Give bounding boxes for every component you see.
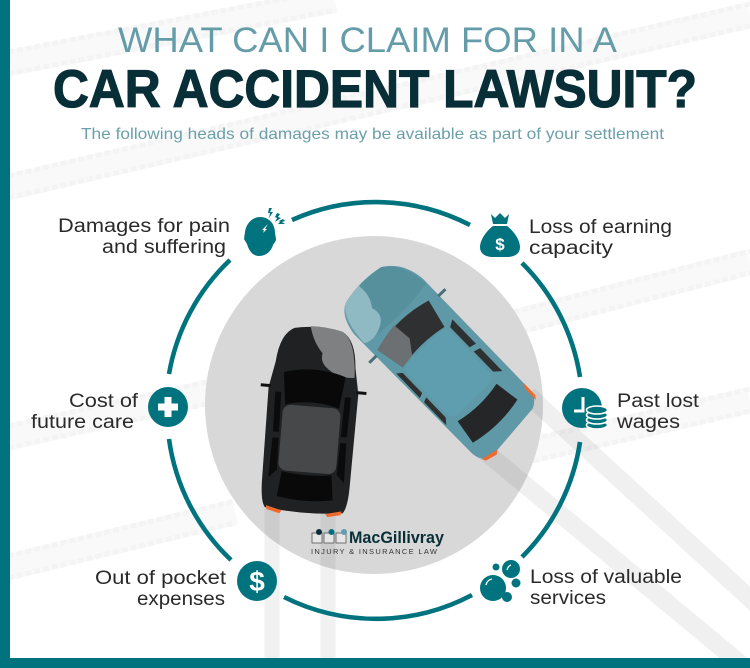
icon: dollar (237, 561, 277, 601)
arc: top (292, 202, 470, 225)
label: past lost wages: Past lost (617, 391, 700, 412)
label: past lost wages (616, 391, 700, 433)
title line 1: WHAT CAN I CLAIM FOR IN A (118, 21, 618, 60)
logo tagline: INJURY & INSURANCE LAW (311, 547, 438, 556)
icon: head with lightning (244, 208, 285, 256)
title line 2: CAR ACCIDENT LAWSUIT? (53, 60, 697, 119)
label: out of pocket expenses: expenses (137, 589, 225, 610)
label: loss of earning capacity: Loss of earning (529, 217, 672, 238)
icon: money bag (480, 213, 520, 257)
bottom frame bar (0, 658, 750, 668)
label: pain and suffering: and suffering (102, 237, 226, 258)
arc: upper left (169, 260, 230, 374)
icon: clock and coins (562, 388, 608, 429)
label: loss of earning capacity: capacity (529, 238, 614, 259)
icon: plus (148, 387, 188, 427)
arc: upper right (522, 263, 580, 377)
label: cost of future care: Cost of (69, 391, 139, 412)
logo name: MacGillivray (349, 528, 445, 547)
icon: dollar: $ (249, 566, 265, 597)
subtitle: The following heads of damages may be available as part of your settlement (81, 126, 665, 143)
left frame bar (0, 0, 10, 668)
label: cost of future care (31, 391, 139, 433)
label: loss of earning capacity (529, 217, 672, 259)
icon: bubbles (480, 560, 520, 602)
ring segments (169, 202, 580, 619)
arc: bottom (284, 595, 472, 619)
arc: lower right (522, 442, 580, 557)
logo mark (312, 529, 347, 543)
label: past lost wages: wages (616, 412, 680, 433)
black car (250, 322, 372, 520)
grey centre circle (205, 236, 543, 574)
skid marks (272, 395, 750, 668)
label: loss of valuable services: Loss of valuable (530, 567, 682, 588)
label: loss of valuable services: services (530, 588, 606, 609)
label: pain and suffering (58, 216, 230, 258)
label: cost of future care: future care (31, 412, 134, 433)
icon: money bag: $ (495, 235, 505, 254)
teal car (326, 244, 553, 474)
label: out of pocket expenses (95, 568, 227, 610)
arc: lower left (169, 439, 231, 560)
label: loss of valuable services (530, 567, 682, 609)
logo (311, 528, 445, 556)
label: pain and suffering: Damages for pain (58, 216, 230, 237)
label: out of pocket expenses: Out of pocket (95, 568, 227, 589)
